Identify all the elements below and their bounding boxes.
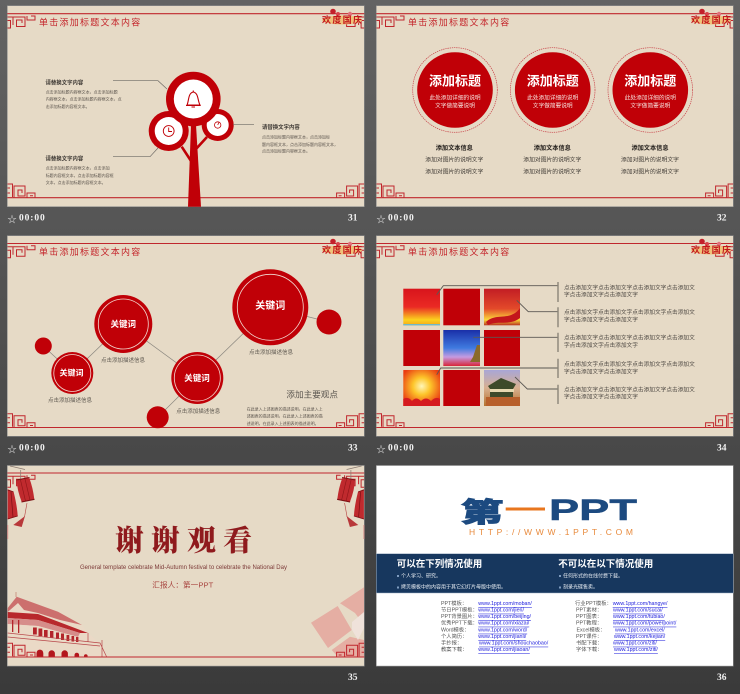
footer [8, 214, 358, 224]
link list left: PPT背景图片： [441, 612, 478, 620]
bubble captions: 点击添加描述信息 [101, 356, 145, 364]
text block: right: 题内容框文本，点击添加标题内容框文本， [262, 141, 338, 147]
link list left: www.1ppt.com/jieri/ [478, 608, 524, 614]
link list left [441, 599, 549, 653]
panel: slide 32 three circles [376, 6, 733, 225]
text rows: 字点击添加文字点击添加文字 [564, 367, 638, 375]
link list left: www.1ppt.com/xiazai/ [478, 621, 530, 627]
logo [461, 491, 637, 537]
caption column 2: 添加对图片的说明文字 [523, 168, 581, 176]
link list right: 行业PPT模板： [575, 599, 612, 607]
link list right: www.1ppt.com/hangye/ [613, 601, 668, 607]
text block: lower left: 标题内容框文本，点击添加标题内容框 [46, 172, 114, 178]
subtitle: General template celebrate Mid-Autumn festival to celebrate the National Day [80, 565, 287, 571]
footer [376, 444, 727, 454]
main point text: 述说明，在此录入上述图表的描述说明。 [247, 420, 319, 426]
page number: 35 [348, 673, 358, 683]
text block: upper left: 击添加标题内容框文本。 [46, 103, 90, 109]
prohibited column: 刻录光碟售卖。 [563, 584, 598, 591]
text rows: 字点击添加文字点击添加文字 [564, 341, 638, 349]
keyword bubble large: 关键词 [255, 299, 285, 312]
footer: 34 [717, 444, 727, 454]
link list right: www.1ppt.com/ziti/ [614, 647, 658, 653]
text block: right [262, 123, 338, 154]
text rows: 点击添加文字点击添加文字点击添加文字点击添加文 [564, 360, 695, 368]
circle 1 [413, 48, 497, 132]
circle 3 [608, 48, 693, 132]
prohibited column [558, 558, 653, 591]
circle 2 [510, 48, 595, 132]
text rows: 字点击添加文字点击添加文字 [564, 393, 638, 401]
link list right: www.1ppt.com/excel/ [615, 628, 665, 634]
caption column 3: 添加对图片的说明文字 [621, 156, 679, 164]
link list right: PPT图表： [576, 612, 602, 620]
caption column 3: 添加文本信息 [631, 144, 669, 152]
lanterns left [8, 466, 34, 539]
main title: 谢谢观看 [115, 518, 259, 560]
link list right: PPT教程： [576, 619, 602, 627]
text block: upper left: 请替换文字内容 [46, 78, 84, 86]
festive logo [691, 9, 731, 25]
ornamental frame [7, 473, 364, 657]
small dots [35, 310, 342, 428]
link list left: www.1ppt.com/word/ [478, 628, 528, 634]
lanterns right [337, 466, 364, 539]
text block: lower left: 点击添加标题内容框文本，点击添加 [46, 164, 110, 170]
ornamental frame [7, 244, 364, 428]
caption column 2: 添加对图片的说明文字 [523, 156, 581, 164]
festive logo [322, 9, 362, 25]
logo: HTTP://WWW.1PPT.COM [469, 527, 633, 537]
text block: upper left: 内容框文本，点击添加标题内容框文本，点 [46, 96, 122, 102]
link list left: 节日PPT模板： [441, 606, 478, 614]
link list right: PPT课件： [576, 632, 602, 640]
image grid [403, 289, 520, 406]
ornamental frame [7, 14, 364, 198]
caption column 2 [523, 144, 581, 176]
footer: 32 [717, 214, 727, 224]
footer: 00:00 [388, 444, 415, 454]
footer: ☆ [8, 214, 17, 224]
ornamental frame [376, 244, 733, 428]
text rows: 字点击添加文字点击添加文字 [564, 315, 638, 323]
tree [149, 72, 234, 207]
bubble captions: 点击添加描述信息 [176, 407, 221, 415]
allowed column: 个人学习、研究。 [401, 572, 441, 579]
text block: lower left: 请替换文字内容 [46, 154, 84, 162]
title: 单击添加标题文本内容 [408, 16, 511, 28]
keyword bubble large [232, 269, 308, 345]
link list right: 字体下载： [576, 645, 602, 653]
icon: timer [214, 122, 221, 128]
link list left: www.1ppt.com/beijing/ [478, 614, 532, 620]
circle 3: 文字做简要说明 [630, 101, 671, 109]
footer: ☆ [376, 214, 386, 224]
panel: slide 36 logo and usage [376, 466, 733, 683]
footer: 33 [348, 444, 358, 454]
link list right: www.1ppt.com/ziti/ [613, 641, 657, 647]
bubble captions [48, 348, 293, 415]
link list left: Word模板： [441, 626, 469, 634]
text rows: 点击添加文字点击添加文字点击添加文字点击添加文 [564, 283, 695, 291]
allowed column: 拷贝模板中的内容用于其它幻灯片母版中使用。 [401, 584, 506, 591]
footer: 31 [348, 214, 358, 224]
logo: PPT [549, 494, 637, 527]
divider bars [557, 282, 559, 404]
link list right: PPT素材： [576, 606, 602, 614]
footer: ☆ [8, 444, 17, 454]
title: 单击添加标题文本内容 [39, 246, 142, 257]
main point text: 添加主要观点 [286, 389, 338, 400]
text rows: 点击添加文字点击添加文字点击添加文字点击添加文 [564, 334, 695, 342]
keyword bubble 2: 关键词 [111, 319, 136, 329]
circle 3: 此处添加详细的说明 [625, 93, 676, 101]
circle 1: 添加标题 [429, 74, 481, 88]
festive logo [691, 239, 731, 255]
link list left: 优秀PPT下载： [441, 619, 478, 627]
main point text [247, 389, 338, 426]
caption column 2: 添加文本信息 [534, 144, 571, 152]
icon: bell [186, 90, 201, 107]
prohibited column: 不可以在以下情况使用 [558, 558, 653, 570]
gift decoration [311, 587, 364, 657]
main point text: 述图表的描述说明，在此录入上述图表的描 [247, 412, 323, 418]
bubble captions: 点击添加描述信息 [249, 348, 293, 356]
text block: right: 请替换文字内容 [262, 123, 300, 131]
footer: 00:00 [19, 214, 46, 224]
presenter: 汇报人：第一PPT [152, 580, 214, 590]
text block: right: 点击添加标题内容框文本。 [262, 148, 310, 154]
circle 3: 添加标题 [624, 74, 676, 88]
caption column 3: 添加对图片的说明文字 [621, 168, 679, 176]
keyword bubble 2 [94, 295, 152, 353]
usage band [376, 554, 733, 593]
link list right: www.1ppt.com/powerpoint/ [613, 621, 677, 627]
circle 1: 此处添加详细的说明 [429, 93, 481, 101]
logo: 第 [461, 491, 503, 530]
panel: slide 34 image grid [376, 236, 733, 454]
caption column 1 [425, 144, 483, 176]
footer [8, 444, 358, 454]
link list left: www.1ppt.com/shouchaobao/ [479, 641, 549, 647]
gate tower illustration [8, 592, 107, 658]
caption column 1: 添加文本信息 [436, 144, 473, 152]
footer: 00:00 [388, 214, 415, 224]
title: 单击添加标题文本内容 [408, 246, 511, 257]
prohibited column: 任何形式的在线付费下载。 [563, 572, 623, 579]
keyword bubble 4: 关键词 [60, 368, 84, 378]
link list left: 个人简历： [441, 632, 468, 640]
link list right: www.1ppt.com/kejian/ [614, 634, 666, 640]
caption column 1: 添加对图片的说明文字 [425, 168, 483, 176]
text block: right: 点击添加标题内容框文本，点击添加标 [262, 134, 330, 140]
link list right: www.1ppt.com/sucai/ [613, 608, 663, 614]
footer: ☆ [376, 444, 386, 454]
festive logo: 欢度国庆 [322, 14, 362, 25]
page number: 36 [717, 673, 727, 683]
bubble captions: 点击添加描述信息 [48, 396, 92, 404]
text rows: 点击添加文字点击添加文字点击添加文字点击添加文 [564, 308, 695, 316]
link list right [575, 599, 677, 653]
keyword bubble 4 [51, 352, 93, 394]
circle 1: 文字做简要说明 [435, 101, 475, 109]
leader lines [113, 81, 254, 157]
link list right: 书配下载： [576, 639, 602, 647]
title: 单击添加标题文本内容 [39, 16, 142, 28]
link list left: www.1ppt.com/jianli/ [478, 634, 527, 640]
panel: slide 31 tree diagram [7, 6, 364, 225]
caption column 1: 添加对图片的说明文字 [425, 156, 483, 164]
caption column 3 [621, 144, 679, 176]
footer: 00:00 [19, 444, 46, 454]
festive logo: 欢度国庆 [691, 244, 731, 255]
link list right: Excel模板： [576, 626, 605, 634]
link list left: www.1ppt.com/moban/ [478, 601, 532, 607]
connector lines [437, 286, 558, 389]
circle 2: 添加标题 [527, 74, 579, 88]
keyword bubble 3 [171, 352, 223, 404]
festive logo: 欢度国庆 [322, 244, 362, 255]
main point text: 在此录入上述图表的描述说明，在此录入上 [247, 406, 323, 412]
text rows [564, 283, 695, 401]
link list left: 手抄报： [441, 639, 462, 647]
link list left: 教案下载： [441, 645, 468, 653]
festive logo: 欢度国庆 [691, 14, 731, 25]
ornamental frame [376, 14, 733, 198]
keyword bubble 3: 关键词 [184, 373, 210, 383]
circle 2: 文字做简要说明 [533, 101, 573, 109]
link list right: www.1ppt.com/tubiao/ [613, 614, 665, 620]
link list left: www.1ppt.com/jiaoan/ [478, 647, 530, 653]
text block: upper left [46, 78, 122, 109]
icon: clock [163, 126, 174, 136]
allowed column: 可以在下列情况使用 [397, 558, 482, 570]
festive logo [322, 239, 362, 255]
allowed column [397, 558, 506, 591]
link list left: PPT模板： [441, 599, 467, 607]
panel: slide 35 thank you [7, 466, 364, 683]
connector lines [43, 307, 329, 417]
footer [376, 214, 727, 224]
text block: lower left: 文本，点击添加标题内容框文本。 [46, 179, 106, 185]
circle 2: 此处添加详细的说明 [527, 93, 579, 101]
text block: upper left: 点击添加标题内容框文本，点击添加标题 [46, 88, 118, 94]
text rows: 点击添加文字点击添加文字点击添加文字点击添加文 [564, 385, 695, 393]
panel: slide 33 keyword bubbles [7, 236, 364, 454]
text rows: 字点击添加文字点击添加文字 [564, 290, 638, 298]
text block: lower left [46, 154, 114, 185]
